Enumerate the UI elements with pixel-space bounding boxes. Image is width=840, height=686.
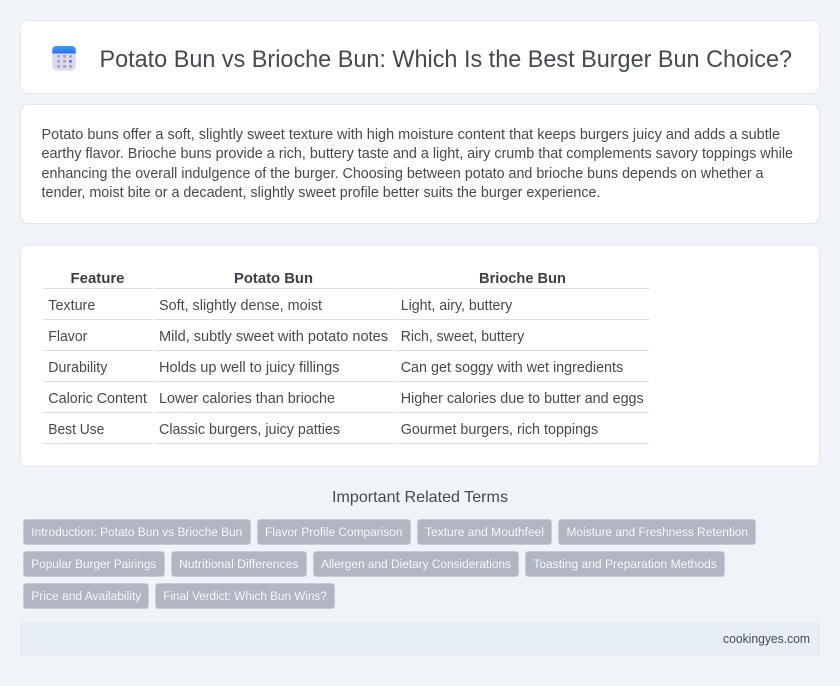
- tag: allergen: Allergen and Dietary Considerations: [321, 557, 511, 571]
- panel: introduction paragraph: [20, 104, 820, 224]
- table header row: Brioche Bun: [479, 270, 566, 287]
- tag: nutrition: Nutritional Differences: [179, 557, 298, 571]
- tag: texture: [418, 520, 552, 544]
- table row: caloric content: Caloric Content: [48, 391, 147, 407]
- tag: verdict: Final Verdict: Which Bun Wins?: [163, 589, 327, 603]
- tag: pairings: [24, 552, 164, 576]
- tag: flavor profile: Flavor Profile Comparison: [265, 525, 402, 539]
- tag: introduction: Introduction: Potato Bun vs Brioche Bun: [31, 525, 242, 539]
- paragraph line 3: enhancing the overall indulgence of the burger. Choosing between potato and brioche buns depends on whether a: [42, 166, 764, 182]
- table row: best use: Best Use: [48, 422, 104, 438]
- table row: caloric content: [48, 391, 644, 407]
- tag: moisture: [558, 520, 756, 544]
- table row: best use: [48, 422, 598, 438]
- table row: caloric content: Lower calories than brioche: [159, 391, 335, 407]
- paragraph line 2: earthy flavor. Brioche buns provide a rich, buttery taste and a light, airy crumb that complements savory toppings while: [42, 146, 793, 162]
- table row: caloric content: Higher calories due to butter and eggs: [401, 391, 644, 407]
- footer source text: cookingyes.com: [723, 632, 810, 646]
- table row: best use: Gourmet burgers, rich toppings: [401, 422, 598, 438]
- related term tags: [24, 520, 756, 608]
- paragraph line 1: Potato buns offer a soft, slightly sweet texture with high moisture content that keeps burgers juicy and adds a subtle: [42, 127, 780, 143]
- table header row: Potato Bun: [234, 270, 313, 287]
- table row: flavor: Mild, subtly sweet with potato notes: [159, 329, 388, 345]
- tag: allergen: [314, 552, 518, 576]
- paragraph line 4: tender, moist bite or a decadent, slightly sweet profile better suits the burger experience.: [42, 185, 600, 201]
- table row: flavor: [48, 329, 525, 345]
- table row: durability: [48, 360, 623, 376]
- table row: best use: Classic burgers, juicy patties: [159, 422, 340, 438]
- table row: flavor: Flavor: [48, 329, 88, 345]
- tag: flavor profile: [258, 520, 410, 544]
- table row: texture: [48, 298, 513, 314]
- table row: durability: Durability: [48, 360, 108, 376]
- table row: texture: Light, airy, buttery: [401, 298, 513, 314]
- table header row: [70, 270, 566, 287]
- tag: introduction: [24, 520, 250, 544]
- tag: price: Price and Availability: [31, 589, 142, 603]
- footer bar: [20, 622, 820, 656]
- panel: title header: [20, 20, 820, 94]
- heading: important related terms: Important Related Terms: [332, 489, 508, 506]
- table header row: Feature: [70, 270, 124, 287]
- icon: calendar: [52, 46, 76, 70]
- tag: pairings: Popular Burger Pairings: [31, 557, 156, 571]
- tag: nutrition: [172, 552, 306, 576]
- tag: texture: Texture and Mouthfeel: [425, 525, 544, 539]
- tag: moisture: Moisture and Freshness Retention: [566, 525, 748, 539]
- table row: texture: Soft, slightly dense, moist: [159, 298, 322, 314]
- table row: texture: Texture: [48, 298, 95, 314]
- table row: durability: Holds up well to juicy fillings: [159, 360, 340, 376]
- tag: toasting: [526, 552, 724, 576]
- panel: comparison table: [20, 245, 820, 466]
- table row: flavor: Rich, sweet, buttery: [401, 329, 525, 345]
- tag: price: [24, 584, 148, 608]
- tag: toasting: Toasting and Preparation Methods: [533, 557, 717, 571]
- table row: durability: Can get soggy with wet ingredients: [401, 360, 623, 376]
- title: Potato Bun vs Brioche Bun: Which Is the Best Burger Bun Choice?: [100, 46, 792, 73]
- tag: verdict: [156, 584, 334, 608]
